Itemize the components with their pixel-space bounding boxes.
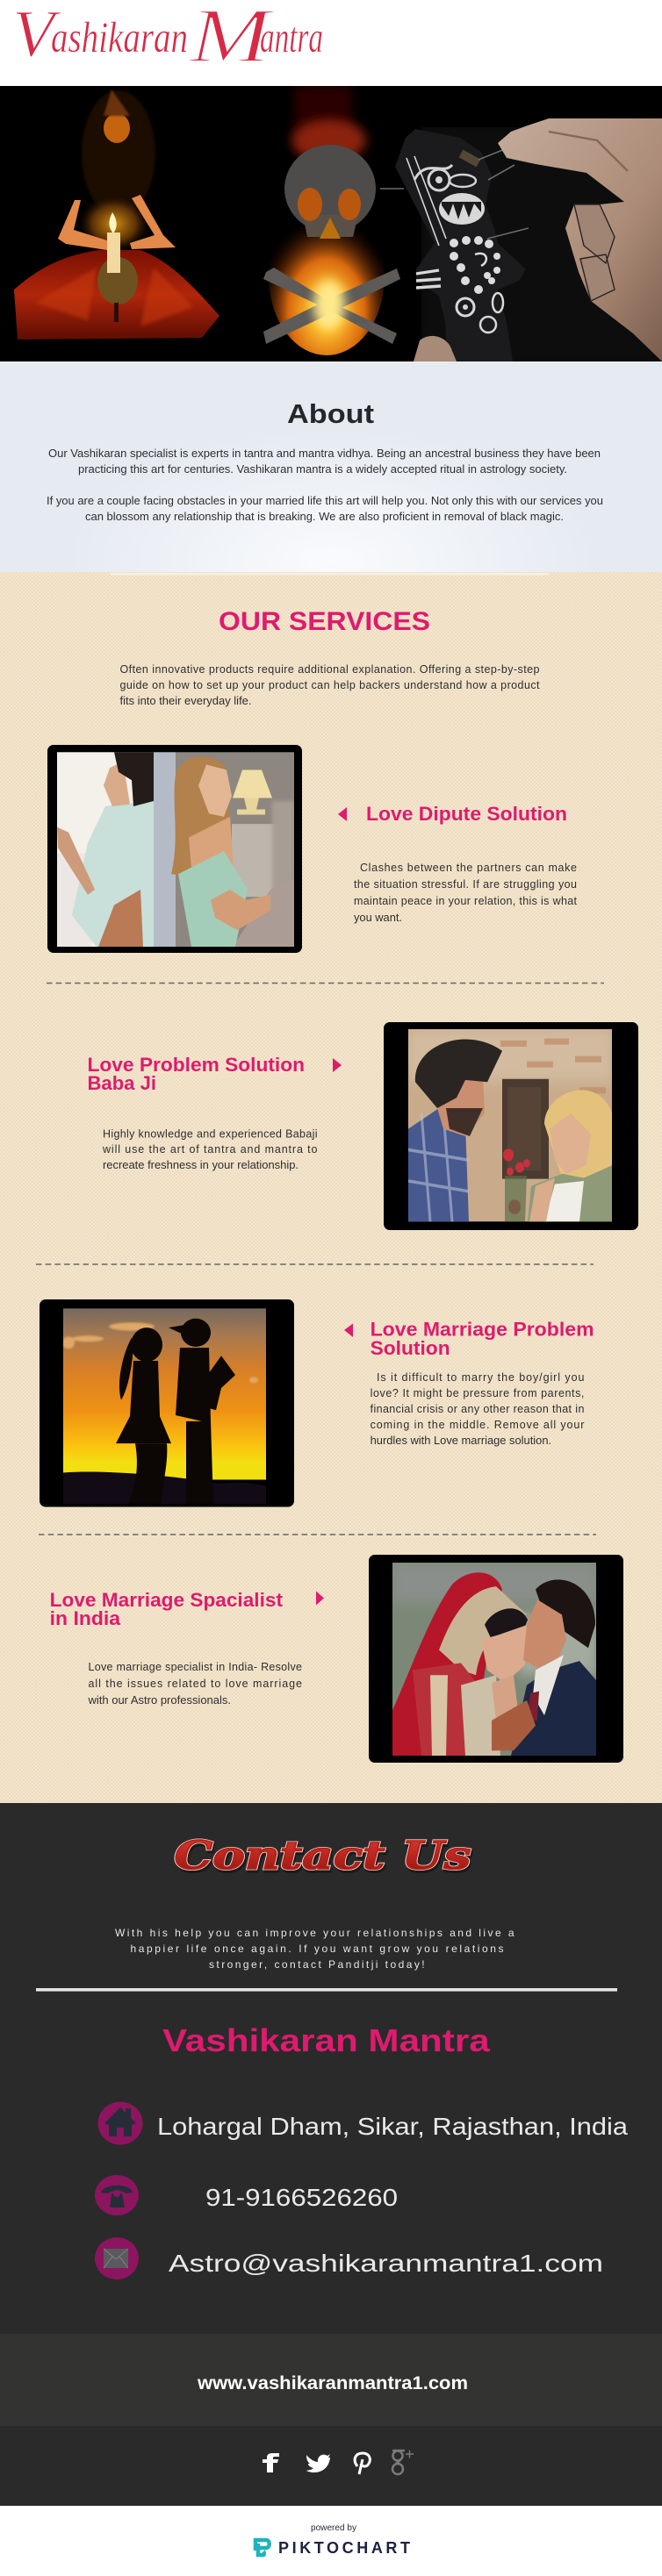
service card 3 image frame [40,1299,294,1507]
service text 2: recreate freshness in your relationship. [103,1159,299,1171]
brand name: Vashikaran Mantra [162,2022,491,2058]
service text 1: maintain peace in your relation, this is what [354,895,578,907]
service text 3: coming in the middle. Remove all your [371,1419,584,1431]
title: love problem solution baba ji [88,1054,305,1094]
address: Lohargal Dham, Sikar, Rajasthan, India [157,2113,628,2140]
flaming skull [263,86,400,355]
services intro paragraph [119,663,540,707]
service text 3: love? It might be pressure from parents, [371,1387,584,1399]
heading: our services: OUR SERVICES [219,607,430,636]
icon: google plus [392,2450,414,2474]
woman with candle [14,89,219,340]
logo: Vashikaran Mantra: ashikaran [51,12,188,61]
contact paragraph: With his help you can improve your relationships and live a [115,1927,514,1939]
panel: our services [0,572,662,1803]
title: love marriage spacialist in india: in India [50,1607,121,1629]
hero image: candle ritual, skull and voodoo doll [0,86,662,361]
footer: powered by piktochart [0,2506,662,2576]
service text 3 [371,1371,584,1447]
title: love marriage problem solution: Solution [371,1337,450,1359]
website band [0,2334,662,2426]
title: love dipute solution: Love Dipute Solution [366,803,567,825]
logo: Vashikaran Mantra: antra [260,12,323,61]
piktochart wordmark: PIKTOCHART [278,2539,410,2557]
title: love marriage spacialist in india [50,1589,284,1629]
heading: About: About [287,398,374,429]
arrow left 3 [344,1323,353,1337]
arrow right 2 [333,1058,342,1072]
contact paragraph: happier life once again. If you want grow you relations [130,1943,503,1955]
service text 3: financial crisis or any other reason that in [371,1403,584,1415]
icon: pinterest [355,2453,370,2474]
heading: contact us: Contact Us [174,1834,471,1878]
icon: house [98,2102,142,2144]
arrow right 4 [316,1592,324,1606]
service text 2: Highly knowledge and experienced Babaji [103,1128,318,1141]
services intro paragraph: fits into their everyday life. [119,695,251,707]
footer: powered by piktochart: powered by [311,2522,357,2533]
services intro paragraph: Often innovative products require additional explanation. Offering a step-by-step [119,663,540,676]
logo: Vashikaran Mantra [12,0,323,79]
panel: contact [0,1803,662,2506]
email: Astro@vashikaranmantra1.com [169,2250,603,2277]
service text 4: with our Astro professionals. [87,1694,231,1707]
about paragraph: practicing this art for centuries. Vashikaran mantra is a widely accepted ritual in astrology society. [78,463,567,476]
about paragraph: can blossom any relationship that is breaking. We are also proficient in removal of black magic. [85,511,564,523]
title: love marriage problem solution [371,1319,594,1359]
service text 3: Is it difficult to marry the boy/girl you [377,1371,584,1384]
service text 2 [102,1128,318,1171]
piktochart logo mark [255,2540,270,2555]
icon: twitter [306,2454,330,2472]
service text 1: you want. [354,912,402,924]
social icons [263,2450,414,2474]
title: love marriage problem solution: Love Marriage Problem [371,1319,594,1341]
arrow left 1 [338,807,347,821]
service text 4: all the issues related to love marriage [88,1678,302,1690]
phone number: 91-9166526260 [205,2184,398,2211]
service card 4 image frame [369,1555,623,1763]
service card 2 image frame [384,1022,638,1230]
website band: www.vashikaranmantra1.com [197,2373,468,2394]
services intro paragraph: guide on how to set up your product can help backers understand how a product [119,679,540,691]
title: love problem solution baba ji: Baba Ji [88,1072,156,1094]
service text 4 [87,1661,302,1707]
service text 1: Clashes between the partners can make [360,862,577,874]
title: love marriage spacialist in india: Love Marriage Spacialist [50,1589,284,1611]
heading: contact us: Contact Us [174,1834,471,1878]
hand [498,118,662,361]
about paragraph [47,447,603,523]
icon: mail [95,2237,139,2279]
service card 1 image frame [47,745,302,953]
service text 2: will use the art of tantra and mantra to [102,1143,318,1156]
service text 1 [354,862,578,924]
contact paragraph: stronger, contact Panditji today! [209,1958,425,1971]
contact paragraph [115,1927,514,1971]
icon: telephone [95,2175,139,2215]
title: love problem solution baba ji: Love Problem Solution [88,1054,305,1076]
icon: facebook [263,2453,279,2472]
service text 4: Love marriage specialist in India- Resolve [88,1661,302,1673]
panel: about [0,361,662,572]
voodoo doll [380,129,529,361]
heading: contact us: Contact Us [176,1836,472,1881]
service text 3: hurdles with Love marriage solution. [371,1435,551,1447]
service text 1: the situation stressful. If are struggling you [354,878,577,891]
about paragraph: If you are a couple facing obstacles in your married life this art will help you. Not only this with our services you [47,495,603,507]
about paragraph: Our Vashikaran specialist is experts in tantra and mantra vidhya. Being an ancestral business they have been [48,447,601,460]
